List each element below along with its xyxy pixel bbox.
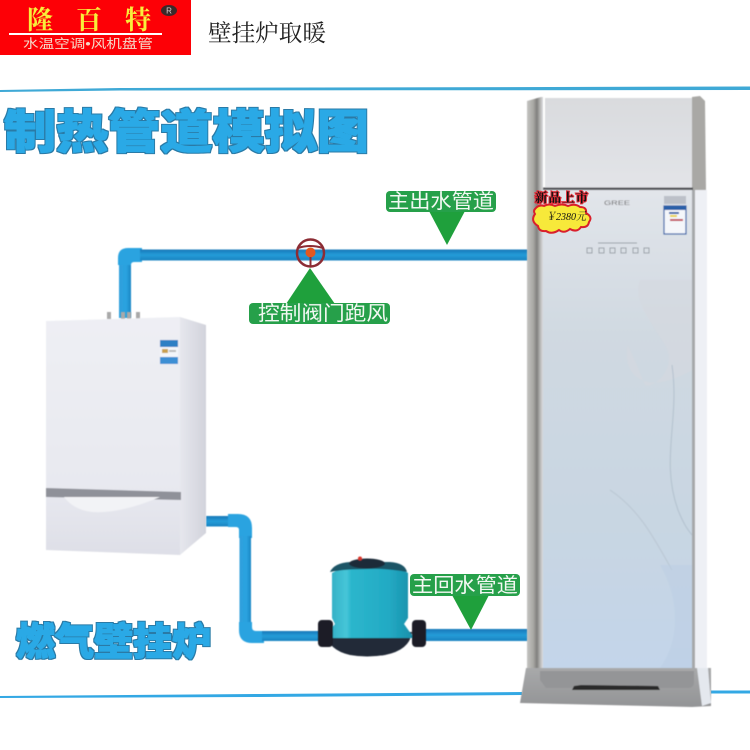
top frame line xyxy=(0,86,750,92)
valve handwheel xyxy=(297,240,324,266)
circulation pump xyxy=(318,556,426,656)
unit base xyxy=(520,668,711,707)
tag price: ￥2380元 xyxy=(546,211,587,223)
pump right union xyxy=(412,620,426,647)
boiler grey band xyxy=(46,488,181,500)
wall-hung gas boiler xyxy=(46,312,206,555)
registered mark xyxy=(161,5,177,16)
floor-standing fan coil unit xyxy=(520,96,711,707)
pump body xyxy=(324,566,414,638)
unit upper panel xyxy=(545,98,692,188)
page heading: 壁挂炉取暖 xyxy=(208,20,326,47)
unit brand mark: GREE xyxy=(604,201,630,207)
pump lower housing xyxy=(325,632,412,656)
boiler energy label xyxy=(160,340,178,364)
brand logo xyxy=(0,0,191,55)
unit energy label xyxy=(664,196,686,234)
brand slogan: 水温空调•风机盘管 xyxy=(23,36,153,51)
unit control buttons xyxy=(587,243,649,253)
callout: main return pipe xyxy=(410,574,520,630)
price tag xyxy=(533,190,590,233)
callout: main outlet pipe xyxy=(386,190,496,245)
callout: main return pipe: 主回水管道 xyxy=(412,574,518,597)
pipe: main outlet xyxy=(118,248,528,318)
unit lower panel xyxy=(543,190,692,670)
callout: control valve vent: 控制阀门跑风 xyxy=(258,302,388,325)
pipe: main return xyxy=(206,514,528,643)
callout: main outlet pipe: 主出水管道 xyxy=(388,190,494,213)
registered mark: R xyxy=(166,6,172,16)
tag headline: 新品上市 xyxy=(535,190,588,205)
pump cap xyxy=(330,562,407,572)
diagram title: 制热管道模拟图 xyxy=(4,106,369,158)
boiler caption: 燃气壁挂炉 xyxy=(16,622,211,664)
brand name: 隆 百 特 xyxy=(27,6,151,35)
callout: control valve vent xyxy=(249,268,390,325)
pump left union xyxy=(318,620,333,647)
bottom frame line xyxy=(0,690,750,698)
boiler connectors xyxy=(107,312,140,319)
